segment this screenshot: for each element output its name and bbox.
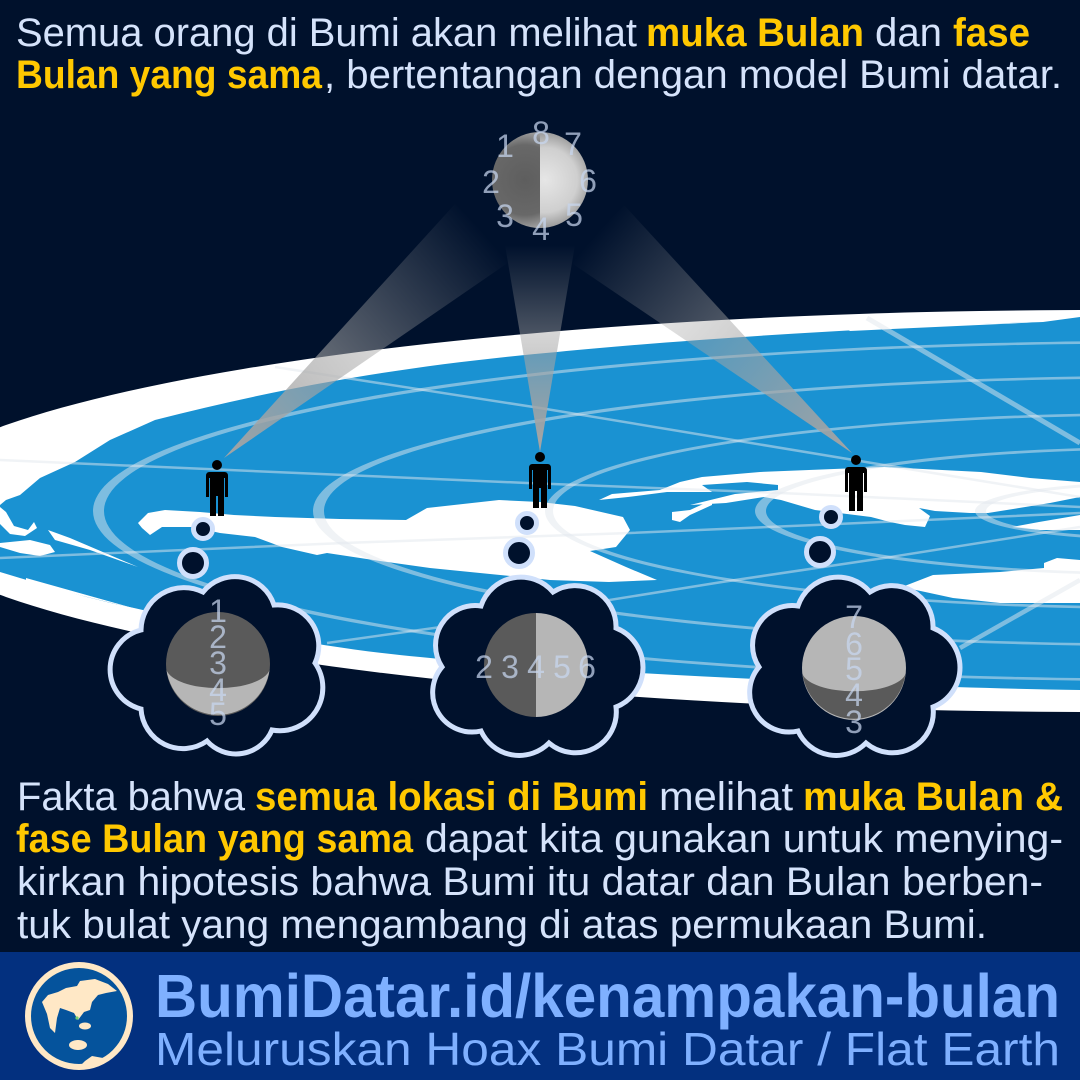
thought bubble 2	[433, 514, 643, 755]
western ice	[0, 507, 138, 567]
title: dan	[875, 11, 942, 55]
light beam 3	[570, 205, 852, 453]
ring 4	[755, 447, 1080, 575]
moon view 1: 3	[209, 645, 227, 681]
moon view 1: 4	[209, 672, 227, 708]
explanation paragraph	[16, 775, 1063, 947]
moon view 2: 4	[527, 649, 545, 685]
latitude rings and meridians	[0, 318, 1080, 681]
person 1	[206, 460, 228, 516]
northern land	[599, 467, 1080, 527]
explanation paragraph: melihat	[659, 775, 793, 819]
moon view 2	[475, 613, 596, 717]
moon view 3: 6	[845, 626, 863, 662]
explanation paragraph: semua lokasi di Bumi	[255, 775, 648, 819]
thought bubble 1	[110, 520, 323, 754]
moon view 1	[166, 593, 270, 732]
ring 2	[313, 376, 1080, 646]
moon view 3	[802, 599, 906, 740]
moon with numbered viewpoints: 4	[532, 211, 550, 247]
moon view 2: 2	[475, 649, 493, 685]
explanation paragraph: fase Bulan yang sama	[16, 817, 414, 861]
moon view 3: 3	[845, 704, 863, 740]
footer tagline: Meluruskan Hoax Bumi Datar / Flat Earth	[155, 1023, 1060, 1075]
person 2	[529, 452, 551, 508]
footer banner	[0, 952, 1080, 1080]
moon view 2: 5	[553, 649, 571, 685]
moon with numbered viewpoints	[484, 121, 596, 240]
moon view 1: 2	[209, 619, 227, 655]
explanation paragraph: muka Bulan &	[803, 775, 1063, 819]
land masses	[0, 322, 1080, 660]
light beam 1	[224, 204, 512, 458]
meridian lines	[0, 318, 1080, 648]
moon view 2: 3	[501, 649, 519, 685]
title: fase	[953, 11, 1030, 55]
explanation paragraph: tuk bulat yang mengambang di atas permukaan Bumi.	[17, 903, 987, 947]
eastern land strip	[1012, 515, 1080, 530]
title: muka Bulan	[646, 11, 864, 55]
moon with numbered viewpoints: 2	[482, 164, 500, 200]
moon view 2: 6	[578, 649, 596, 685]
ring 1	[93, 341, 1080, 681]
flat earth disc	[0, 310, 1080, 712]
icon: globe logo	[28, 965, 130, 1067]
moon with numbered viewpoints: 5	[565, 197, 583, 233]
ring 3	[545, 413, 1080, 609]
explanation paragraph: Fakta bahwa	[17, 775, 246, 819]
title: Semua orang di Bumi akan melihat	[16, 11, 637, 55]
explanation paragraph: dapat kita gunakan untuk menying-	[425, 817, 1063, 861]
central land	[138, 500, 657, 582]
moon view 3: 5	[845, 651, 863, 687]
ring 5	[975, 482, 1080, 540]
moon with numbered viewpoints: 3	[496, 198, 514, 234]
moon with numbered viewpoints: 7	[564, 126, 582, 162]
rim streaks	[26, 322, 1043, 660]
moon view 3: 4	[845, 677, 863, 713]
title: , bertentangan dengan model Bumi datar.	[324, 53, 1062, 97]
title	[16, 11, 1062, 97]
explanation paragraph: kirkan hipotesis bahwa Bumi itu datar dan Bulan berben-	[17, 860, 1043, 904]
disc ocean	[0, 317, 1080, 690]
thought bubble 3	[750, 508, 960, 755]
moon with numbered viewpoints: 6	[579, 163, 597, 199]
light beam 2	[505, 245, 575, 452]
footer url: BumiDatar.id/kenampakan-bulan	[155, 962, 1060, 1030]
moon view 1: 1	[209, 593, 227, 629]
moon with numbered viewpoints: 8	[532, 115, 550, 151]
moon view 1: 5	[209, 696, 227, 732]
islands	[672, 500, 712, 522]
south eastern land	[902, 558, 1080, 603]
moon view 3: 7	[845, 599, 863, 635]
disc white rim	[0, 310, 1080, 712]
moon with numbered viewpoints: 1	[496, 128, 514, 164]
person 3	[845, 455, 867, 511]
title: Bulan yang sama	[16, 53, 323, 97]
